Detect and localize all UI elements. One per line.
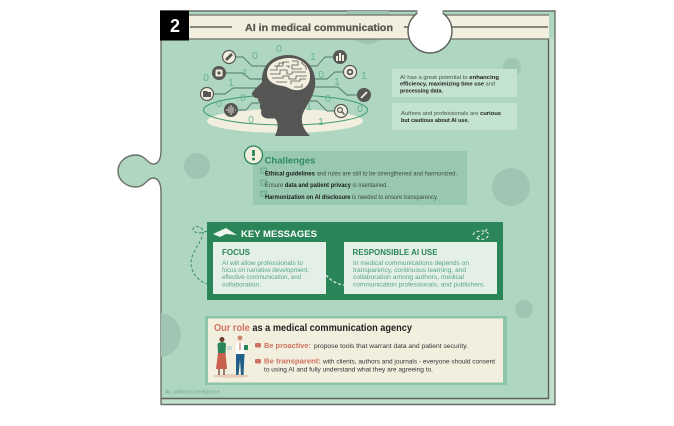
binary digits: [203, 43, 367, 128]
binary digits: 0: [248, 114, 254, 126]
binary digits: 0: [325, 93, 331, 105]
platform ellipse: [207, 109, 363, 133]
card: responsible AI use: [344, 242, 497, 294]
card: responsible AI use: In medical communications depends on: [353, 260, 470, 267]
illustration: two people: [213, 336, 249, 378]
decorative circles: [137, 0, 533, 357]
footnote: AI: artificial intelligence: [165, 390, 220, 396]
binary digits: 0: [357, 103, 363, 115]
icons: [200, 50, 371, 118]
point: be proactive: propose tools that warrant data and patient security.: [314, 343, 468, 350]
binary digits: 0: [240, 92, 246, 104]
card: responsible AI use: RESPONSIBLE AI USE: [352, 248, 438, 257]
heading: AI in medical communication: [245, 22, 393, 34]
puzzle notch: [408, 7, 452, 53]
point: be proactive: Be proactive:: [264, 341, 311, 350]
challenge list: Harmonization on AI disclosure is needed to ensure transparency.: [265, 194, 438, 201]
bullet icons: [260, 168, 266, 196]
card: focus: effective communication, and: [222, 274, 302, 281]
point: be transparent: Be transparent:: [264, 356, 321, 366]
title banner: [160, 10, 549, 40]
binary digits: 1: [306, 101, 312, 113]
binary digits: 1: [361, 70, 367, 82]
callout: potential: processing data.: [400, 88, 443, 94]
callout: potential: efficiency, maximizing time use and: [400, 82, 495, 88]
icon: exclamation: [244, 146, 262, 164]
challenge list: [265, 170, 457, 201]
card: responsible AI use: communication professionals, and publishers.: [353, 282, 485, 288]
card: focus: [213, 242, 326, 294]
icon: gear: [344, 66, 356, 78]
card: responsible AI use: transparency, continuous learning, and: [353, 267, 467, 274]
binary digits: 1: [242, 67, 248, 79]
point: be transparent: [264, 356, 495, 374]
panel: our role: [205, 316, 507, 385]
heading: KEY MESSAGES: [241, 229, 317, 240]
binary digits: 0: [216, 98, 222, 110]
binary digits: 1: [228, 77, 234, 89]
illustration: AI head with brain: [200, 43, 371, 136]
binary digits: 1: [334, 76, 340, 88]
binary digits: 1: [310, 51, 316, 63]
panel: puzzle piece background: [118, 11, 555, 405]
dashed flight path: [191, 227, 488, 285]
callout: curious but cautious: Authors and professionals are curious: [401, 111, 501, 117]
icon: magnifier: [334, 104, 348, 118]
ring: [204, 95, 368, 125]
panel: challenges: [244, 146, 467, 205]
head silhouette: [252, 55, 315, 136]
point: be transparent: with clients, authors and journals - everyone should consent: [322, 358, 495, 366]
card: focus: focus on narrative development,: [222, 267, 309, 274]
binary digits: 1: [318, 116, 324, 128]
callout: potential: [392, 69, 517, 97]
section number: [160, 10, 189, 40]
card: focus: AI will allow professionals to: [222, 260, 304, 267]
heading: Our role as a medical communication agency: [214, 323, 412, 334]
point: be proactive: [264, 341, 468, 350]
icon: chip: [212, 66, 226, 80]
man: [236, 336, 248, 375]
bullet icons: [255, 343, 261, 364]
brain: [267, 58, 310, 90]
challenge list: Ensure data and patient privacy is maintained.: [265, 182, 388, 189]
icon: sound wave: [224, 103, 238, 117]
binary digits: 0: [276, 43, 282, 55]
connector lines: [214, 57, 357, 111]
binary digits: 0: [318, 69, 324, 81]
icon: pencil: [222, 50, 236, 64]
binary digits: 0: [252, 50, 258, 62]
callout: curious but cautious: [392, 103, 517, 130]
card: focus: collaboration.: [222, 282, 261, 288]
card: focus: FOCUS: [222, 248, 251, 257]
binary digits: 0: [203, 72, 209, 84]
panel: key messages: [207, 222, 503, 300]
icon: pen: [357, 88, 371, 102]
section number: 2: [170, 16, 180, 36]
heading: Challenges: [264, 156, 316, 166]
woman: [216, 337, 232, 375]
card: responsible AI use: collaboration among authors, medical: [353, 274, 464, 281]
callout: curious but cautious: but cautious about AI use.: [401, 118, 469, 124]
challenge list: Ethical guidelines and rules are still to be strengthened and harmonized.: [265, 170, 457, 178]
icon: paper plane: [213, 228, 237, 237]
icon: folder: [200, 88, 214, 100]
callout: potential: AI has a great potential to enhancing: [400, 75, 499, 81]
point: be transparent: to using AI and fully understand what they are agreeing to.: [264, 366, 433, 374]
icon: bar chart: [333, 50, 347, 64]
